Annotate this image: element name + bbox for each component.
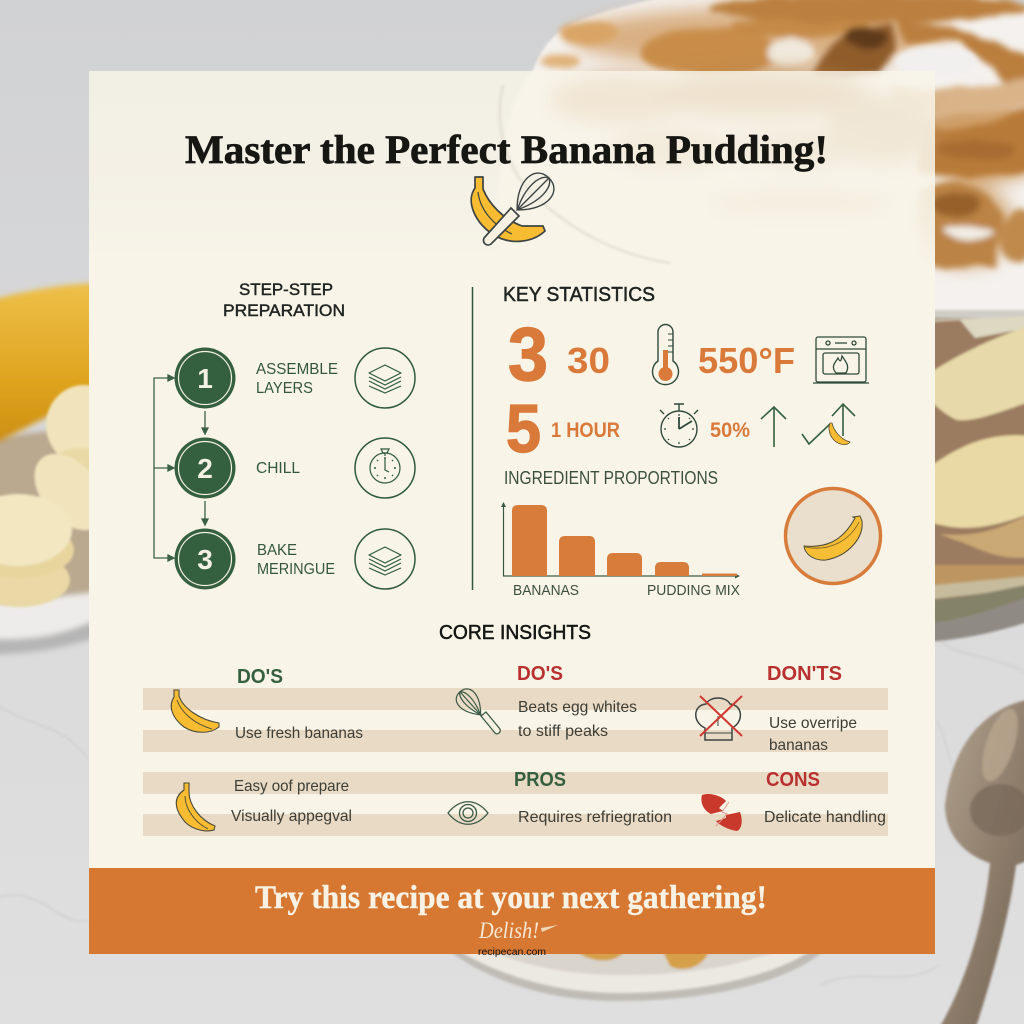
icon: whisk xyxy=(452,685,500,734)
insight text: Use overripe xyxy=(769,715,857,732)
stat numbers: 30 xyxy=(567,340,610,381)
icon: banana two xyxy=(176,783,215,831)
insight text: Beats egg whites xyxy=(518,699,637,716)
column headings xyxy=(237,663,842,791)
step 1 badge: 1 xyxy=(197,363,213,394)
heading: key statistics: KEY STATISTICS xyxy=(503,284,655,306)
banana slices xyxy=(0,385,122,607)
step labels xyxy=(256,361,338,578)
icon: trend with banana xyxy=(802,404,855,445)
column headings: CONS xyxy=(766,769,820,791)
stat numbers: 3 xyxy=(508,312,548,396)
icon: banana and whisk xyxy=(471,167,560,245)
step labels: LAYERS xyxy=(256,380,313,397)
dish edge seen through panel xyxy=(500,85,670,263)
column headings: DO'S xyxy=(517,663,563,685)
step 2 badge: 2 xyxy=(197,453,213,484)
meringue warm wash xyxy=(570,8,1024,267)
icon: oven xyxy=(813,337,869,383)
striped bands xyxy=(143,688,888,836)
heading: core insights: CORE INSIGHTS xyxy=(439,622,591,644)
bottom plate xyxy=(448,950,825,1001)
column headings: DO'S xyxy=(237,666,283,688)
heading: step-step preparation: PREPARATION xyxy=(223,301,345,320)
call to action: Try this recipe at your next gathering! xyxy=(255,880,767,916)
icon: stopwatch xyxy=(355,438,415,498)
step labels: MERINGUE xyxy=(257,561,335,578)
white meringue hole xyxy=(894,45,978,79)
meringue xyxy=(498,0,1024,316)
step labels: ASSEMBLE xyxy=(256,361,338,378)
stat numbers: 1 HOUR xyxy=(551,419,620,442)
glass dish xyxy=(925,310,1024,642)
insight text xyxy=(231,699,886,826)
divider xyxy=(472,287,474,590)
stat numbers: 5 xyxy=(506,391,541,467)
insight text: Use fresh bananas xyxy=(235,725,363,742)
icon: crossed chef hat xyxy=(696,696,742,740)
step 3 badge: 3 xyxy=(197,544,213,575)
insight text: bananas xyxy=(769,737,828,754)
icon: thermometer xyxy=(652,325,678,385)
heading: step-step preparation xyxy=(223,280,345,320)
step 3 badge xyxy=(174,528,236,590)
insight text: Visually appegval xyxy=(231,808,352,825)
insight text: Easy oof prepare xyxy=(234,778,349,795)
marble veins xyxy=(0,640,1024,985)
bar chart xyxy=(501,502,740,599)
icon: up arrow xyxy=(761,407,786,447)
main panel xyxy=(89,71,935,954)
stat numbers: 550°F xyxy=(698,340,795,381)
icon: layers xyxy=(355,348,415,408)
insight text: to stiff peaks xyxy=(518,723,608,740)
heading: step-step preparation: STEP-STEP xyxy=(239,280,333,299)
step 2 badge xyxy=(174,438,236,498)
logo: Delish: Delish! xyxy=(478,918,539,943)
step 1 badge xyxy=(174,348,236,408)
bar chart: PUDDING MIX xyxy=(647,582,740,599)
toasted swirls xyxy=(540,0,1024,270)
spoon xyxy=(938,698,1024,1024)
heading: ingredient proportions: INGREDIENT PROPORTIONS xyxy=(504,468,718,488)
flow arrows xyxy=(154,375,208,561)
panel: key statistics xyxy=(501,284,880,599)
footer banner xyxy=(89,868,935,958)
panel: step-by-step preparation xyxy=(154,280,415,590)
left plate xyxy=(0,425,100,654)
insight text: Delicate handling xyxy=(764,809,886,826)
insight text: Requires refriegration xyxy=(518,809,672,826)
column headings: DON'TS xyxy=(767,663,842,685)
whole banana xyxy=(0,283,100,455)
panel: core insights xyxy=(143,622,888,836)
icon: banana one xyxy=(171,690,219,732)
title: Master the Perfect Banana Pudding! xyxy=(185,127,828,172)
column headings: PROS xyxy=(514,769,566,791)
icon: eye xyxy=(448,802,488,824)
icon: layers second xyxy=(355,529,415,589)
icon: broken egg xyxy=(701,794,742,831)
website: recipecan.com xyxy=(478,946,546,958)
step labels: CHILL xyxy=(256,460,300,477)
icon: stopwatch xyxy=(660,404,698,447)
stat numbers xyxy=(506,312,795,467)
icon: banana badge xyxy=(786,488,880,584)
meringue under panel xyxy=(550,71,935,219)
stat numbers: 50% xyxy=(710,419,750,442)
bar chart: BANANAS xyxy=(513,582,579,599)
step labels: BAKE xyxy=(257,542,297,559)
